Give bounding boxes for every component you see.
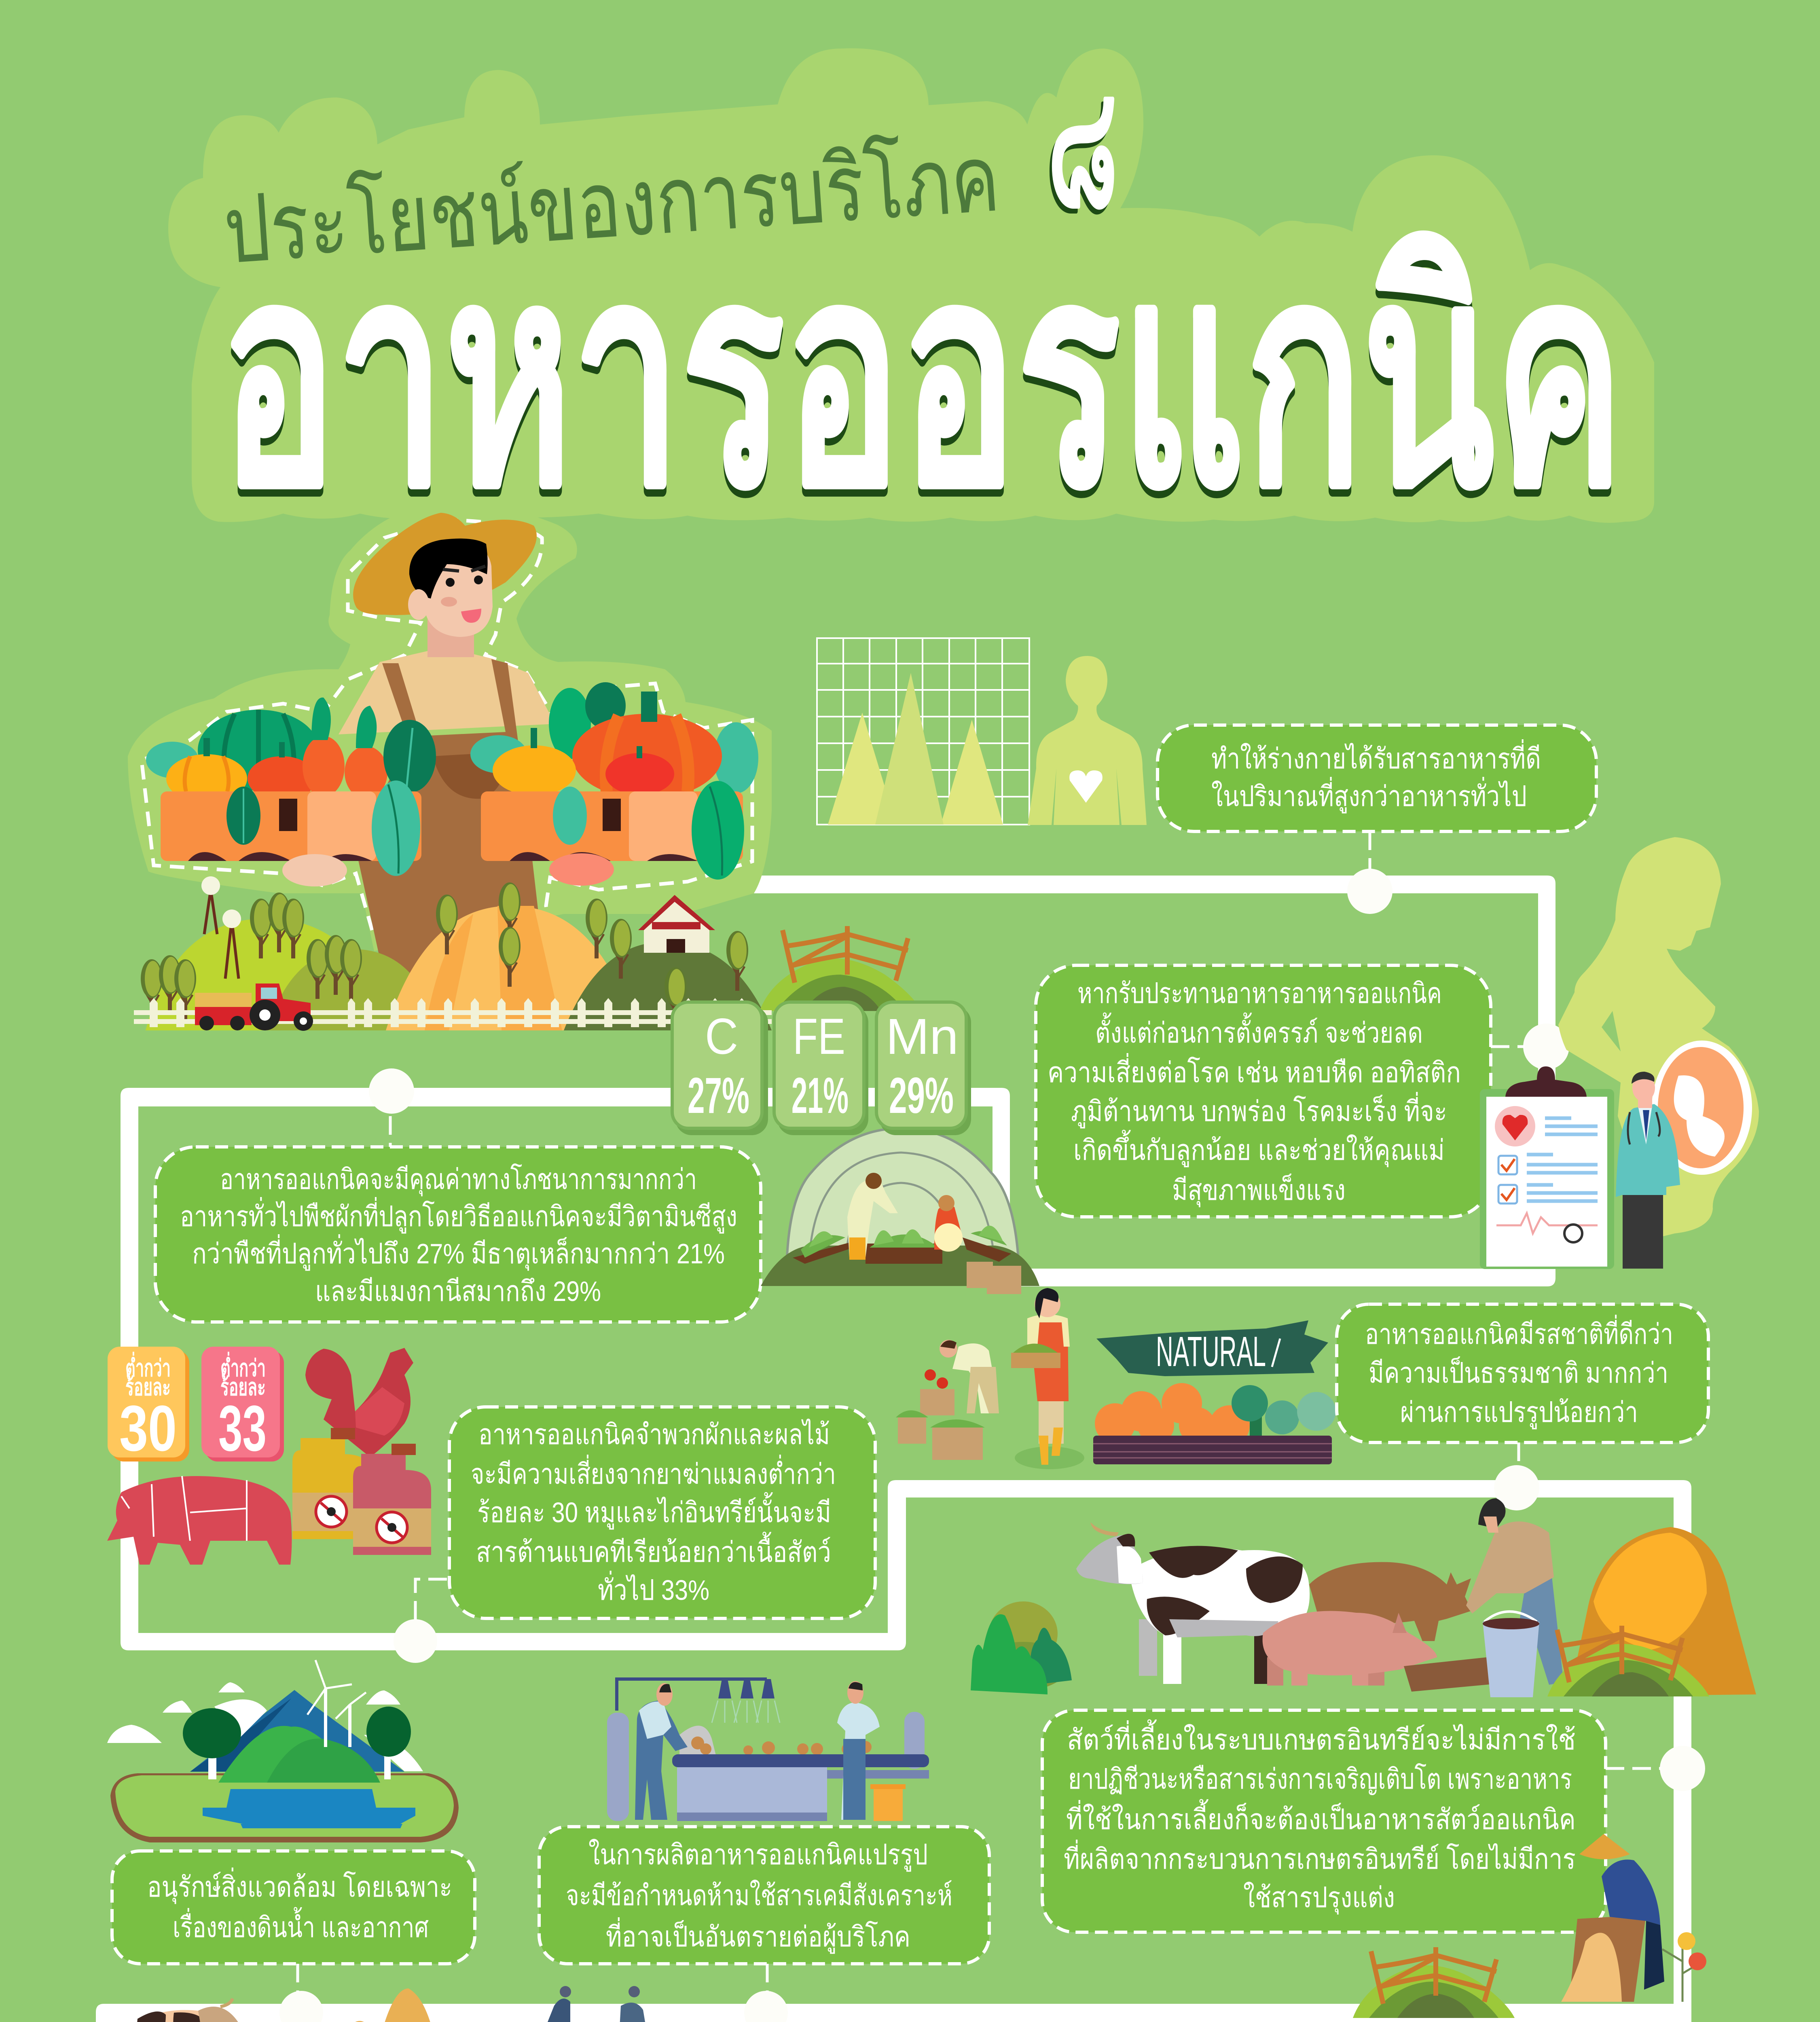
stat tile: antibiotic 33: 33	[218, 1392, 267, 1464]
callout: nutrient values	[155, 1147, 761, 1322]
callout: nutrient values: และมีแมงกานีสมากถึง 29%	[315, 1275, 601, 1307]
stat tile: antibiotic 33	[201, 1347, 284, 1464]
illustration: farmer with vegetable crates	[128, 503, 772, 979]
illustration: pig meat chart	[107, 1476, 292, 1565]
illustration: rooster meat chart	[305, 1348, 413, 1457]
right crate vegetables	[470, 682, 758, 886]
illustration: natural banner with vegetables: NATURAL	[1156, 1328, 1266, 1375]
callout: no antibiotics	[1042, 1710, 1606, 1932]
stat tile: pesticide 30: ต่ำกว่า	[125, 1352, 171, 1381]
callout: processing rules: ในการผลิตอาหารออแกนิคแปรรูป	[588, 1838, 928, 1872]
callout: nutrient values: อาหารทั่วไปพืชผักที่ปลูกโดยวิธีออแกนิคจะมีวิตามินซีสูง	[180, 1197, 737, 1234]
callout: pregnancy health: มีสุขภาพแข็งแรง	[1172, 1174, 1346, 1208]
illustration: food processing line	[607, 1679, 929, 1821]
callout: nutrient values: อาหารออแกนิคจะมีคุณค่าทางโภชนาการมากกว่า	[220, 1163, 697, 1197]
callout: no antibiotics: ที่ใช้ในการเลี้ยงก็จะต้องเป็นอาหารสัตว์ออแกนิค	[1066, 1799, 1576, 1835]
callout: pregnancy health	[1036, 965, 1491, 1217]
illustration: medical clipboard	[1480, 1066, 1614, 1269]
callout: no antibiotics: ยาปฏิชีวนะหรือสารเร่งการเจริญเติบโต เพราะอาหาร	[1068, 1763, 1572, 1795]
callout: taste: มีความเป็นธรรมชาติ มากกว่า	[1369, 1356, 1668, 1389]
callout: pregnancy health: ภูมิต้านทาน บกพร่อง โรคมะเร็ง ที่จะ	[1071, 1092, 1447, 1129]
illustration: pond and fishermen	[465, 1986, 768, 2022]
illustration: greenhouse	[761, 1128, 1039, 1294]
illustration: natural banner with vegetables	[1093, 1320, 1336, 1464]
callout: pesticides and antibiotics: อาหารออแกนิคจำพวกผักและผลไม้	[478, 1419, 830, 1450]
callout: nutrition	[1158, 725, 1596, 831]
stat tile: iron: 21%	[791, 1068, 849, 1124]
stat tile: iron: FE	[793, 1009, 845, 1065]
callout: environment	[112, 1851, 475, 1964]
callout: processing rules: ที่อาจเป็นอันตรายต่อผู้บริโภค	[606, 1917, 910, 1954]
left crate vegetables	[146, 698, 436, 886]
stat tile: carbon vitamin C: C	[705, 1009, 738, 1065]
stat tile: pesticide 30	[108, 1347, 189, 1464]
stat tile: manganese: 29%	[889, 1068, 954, 1124]
title: digit eight	[1045, 49, 1118, 248]
illustration: woman with apron	[1011, 1288, 1084, 1469]
illustration: pesticide bottles	[292, 1428, 431, 1555]
callout: nutrition: ทำให้ร่างกายได้รับสารอาหารที่ดี	[1211, 739, 1541, 774]
callout: no antibiotics: ใช้สารปรุงแต่ง	[1243, 1881, 1395, 1915]
callout: pregnancy health: หากรับประทานอาหารอาหารออแกนิค	[1077, 977, 1442, 1009]
illustration: doctor	[1616, 1072, 1680, 1269]
white path segments	[96, 876, 1726, 2022]
stat tile: carbon vitamin C: 27%	[688, 1068, 749, 1124]
stat tile: carbon vitamin C	[672, 1002, 768, 1135]
illustration: farm hills, tractor and fence	[134, 876, 921, 1031]
callout: pesticides and antibiotics: ร้อยละ 30 หมูและไก่อินทรีย์นั้นจะมี	[477, 1492, 831, 1530]
stat tile: antibiotic 33: ต่ำกว่า	[220, 1352, 266, 1381]
illustration: livestock farm scene	[971, 1498, 1756, 1697]
callout: no antibiotics: สัตว์ที่เลี้ยงในระบบเกษตรอินทรีย์จะไม่มีการใช้	[1067, 1719, 1576, 1756]
callout: pesticides and antibiotics: สารต้านแบคทีเรียน้อยกว่าเนื้อสัตว์	[476, 1531, 831, 1568]
callout: environment: อนุรักษ์สิ่งแวดล้อม โดยเฉพาะ	[147, 1868, 452, 1904]
callout: processing rules	[539, 1827, 989, 1964]
callout: environment: เรื่องของดินน้ำ และอากาศ	[173, 1907, 429, 1943]
title: digit eight: ๘	[1045, 54, 1116, 248]
callout: no antibiotics: ที่ผลิตจากกระบวนการเกษตรอินทรีย์ โดยไม่มีการ	[1064, 1840, 1576, 1875]
callout: pesticides and antibiotics	[449, 1407, 875, 1618]
callout: nutrition: ในปริมาณที่สูงกว่าอาหารทั่วไป	[1211, 777, 1527, 814]
callout: pregnancy health: เกิดขึ้นกับลูกน้อย และช่วยให้คุณแม่	[1073, 1129, 1445, 1168]
stat tile: pesticide 30: 30	[119, 1392, 177, 1464]
callout: taste: ผ่านการแปรรูปน้อยกว่า	[1400, 1396, 1638, 1430]
stat tile: iron	[774, 1002, 868, 1135]
stat tile: antibiotic 33: ร้อยละ	[220, 1374, 266, 1400]
callout: nutrient values: กว่าพืชที่ปลูกทั่วไปถึง 27% มีธาตุเหล็กมากกว่า 21%	[192, 1234, 725, 1271]
stat tile: pesticide 30: ร้อยละ	[125, 1374, 171, 1400]
illustration: nutrient chart	[817, 638, 1029, 825]
callout: processing rules: จะมีข้อกำหนดห้ามใช้สารเคมีสังเคราะห์	[566, 1879, 952, 1911]
title: subtitle line: ประโยชน์ของการบริโภค	[221, 126, 1003, 283]
title: digit eight: ๘	[1048, 49, 1118, 243]
callout: taste	[1337, 1304, 1708, 1442]
dashed connectors	[298, 831, 1660, 2022]
callout: pesticides and antibiotics: จะมีความเสี่ยงจากยาฆ่าแมลงต่ำกว่า	[471, 1455, 836, 1490]
path nodes	[279, 869, 1705, 2022]
stat tile: manganese: Mn	[886, 1009, 959, 1065]
callout: taste: อาหารออแกนิคมีรสชาติที่ดีกว่า	[1365, 1315, 1673, 1350]
callout: pregnancy health: ตั้งแต่ก่อนการตั้งครรภ์ จะช่วยลด	[1095, 1012, 1423, 1049]
illustration: environment island	[107, 1660, 459, 1842]
illustration: cows and farmer at left	[123, 1999, 299, 2022]
illustration: pregnant woman silhouette	[1558, 837, 1759, 1237]
callout: pregnancy health: ความเสี่ยงต่อโรค เช่น หอบหืด ออทิสติก	[1048, 1053, 1461, 1088]
illustration: gardener and vegetable crates	[896, 1340, 999, 1460]
illustration: farmer pouring feed	[1353, 1834, 1706, 2018]
title backdrop blob	[168, 48, 1654, 523]
stat tile: manganese	[876, 1002, 971, 1135]
callout: pesticides and antibiotics: ทั่วไป 33%	[598, 1571, 709, 1606]
illustration: hay stacks	[328, 1988, 487, 2022]
illustration: body silhouette with heart	[1028, 656, 1147, 825]
